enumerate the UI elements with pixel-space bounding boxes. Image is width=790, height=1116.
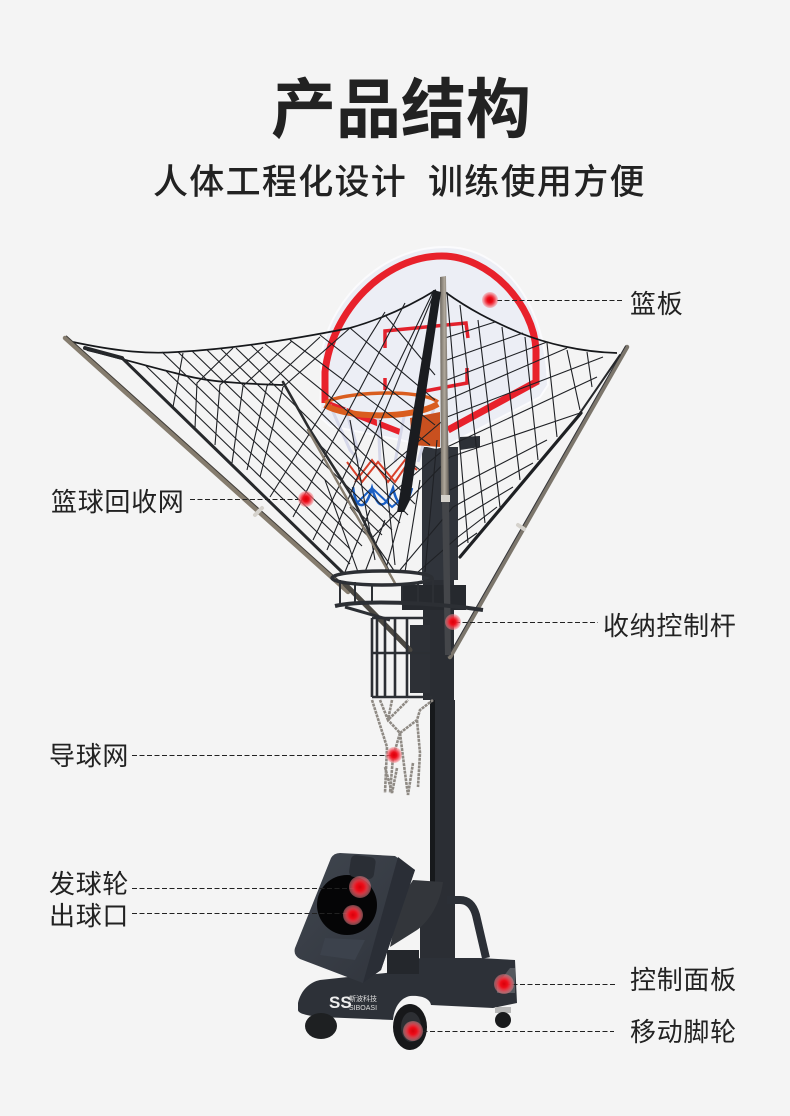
labels: 篮板 [630, 289, 683, 319]
leader lines [132, 300, 622, 1032]
launcher base [298, 958, 517, 1020]
labels: 导球网 [49, 741, 129, 771]
frame arms [65, 336, 627, 657]
labels: 发球轮 [49, 869, 129, 899]
net mesh left family [145, 315, 435, 564]
logo: SS [329, 993, 352, 1012]
front wheel [393, 1004, 427, 1050]
net mesh steep family [173, 292, 433, 550]
labels: 控制面板 [630, 965, 737, 995]
launcher chute [390, 880, 443, 947]
labels: 收纳控制杆 [603, 611, 737, 641]
subtitle: 人体工程化设计 [153, 163, 407, 202]
subtitle [153, 163, 646, 202]
subtitle: 训练使用方便 [428, 163, 646, 202]
net ropes [73, 290, 617, 385]
backboard [320, 247, 548, 450]
labels: 篮球回收网 [51, 487, 185, 517]
basketball machine [65, 247, 627, 1050]
ball collection basket [332, 571, 483, 697]
guide net [372, 700, 433, 795]
logo: SIBOASI [349, 1005, 377, 1012]
logo [329, 993, 377, 1012]
left wheel [305, 1013, 337, 1039]
labels: 移动脚轮 [630, 1017, 737, 1047]
logo: 斯波科技 [349, 994, 377, 1003]
ball launcher [295, 853, 517, 1050]
storage control rod [397, 276, 451, 655]
caster wheel [495, 1007, 511, 1028]
net mesh right family [445, 322, 603, 547]
labels: 出球口 [49, 901, 129, 931]
labels [49, 289, 737, 1047]
title: 产品结构 [271, 73, 531, 146]
launcher head [295, 853, 415, 983]
hotspot markers [298, 292, 514, 1041]
support tube [447, 900, 486, 958]
net mesh centre [325, 417, 458, 572]
ball recovery net [73, 290, 617, 572]
control panel decal [497, 968, 515, 993]
basketball hoop and net [325, 393, 440, 507]
column pole [402, 447, 466, 960]
